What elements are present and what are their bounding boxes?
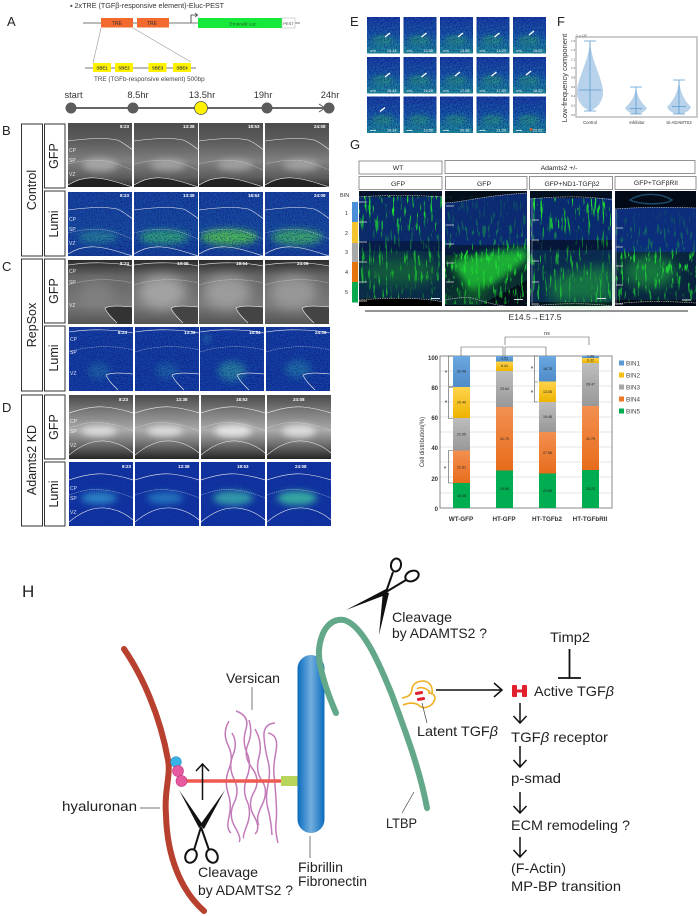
panel E: time-lapse tiles: 13:36: [424, 49, 433, 53]
image row: Control Lumi: 24:08: [314, 193, 326, 198]
x axis labels: HT-GFP: [492, 516, 516, 523]
legend: BIN4: [626, 396, 640, 404]
panel E: time-lapse tiles: 20:38: [460, 128, 470, 132]
image row: Adamts2 KD Lumi: [69, 462, 331, 526]
image row: Adamts2 KD GFP: 24:08: [293, 397, 305, 402]
row label: Adamts2 KD Lumi: Lumi: [47, 480, 61, 508]
image row: Control Lumi: SP: [69, 227, 76, 233]
y axis labels: 20: [431, 477, 439, 483]
panel E: time-lapse tiles: 19:14: [387, 128, 397, 132]
y ticks: [571, 39, 575, 117]
image row: Adamts2 KD Lumi: CP: [70, 486, 78, 492]
image row: Adamts2 KD GFP: 13:38: [176, 397, 188, 402]
panel G: header boxes: GFP+TGFβRII: [634, 180, 678, 187]
promoter arrow: [191, 13, 198, 23]
violin: si-ADAMTS2: [667, 80, 691, 114]
image row: Adamts2 KD GFP: VZ: [70, 443, 76, 449]
significance brackets: *: [444, 466, 447, 473]
Emerald Luc box: Emerald Luc: [230, 22, 257, 28]
row label: Adamts2 KD: [22, 395, 42, 526]
TRE caption: TRE (TGFb-responsive element) 500bp: [94, 76, 205, 83]
timeline: 8.5hr: [127, 90, 149, 100]
y axis labels: 60: [431, 416, 439, 422]
labels: Cleavage: [392, 609, 452, 625]
bar: WT-GFP: [453, 356, 470, 508]
PEST box: PEST: [283, 21, 294, 26]
bar values: 16.75: [543, 367, 552, 371]
row label: RepSox: RepSox: [25, 302, 39, 347]
image row: Control Lumi: VZ: [69, 241, 75, 247]
bar values: 41.79: [500, 437, 509, 441]
image row: Adamts2 KD GFP: CP: [70, 419, 78, 425]
image row: Control GFP: 8:23: [120, 124, 130, 129]
panel E: time-lapse tiles: 16:26: [424, 89, 433, 93]
bar values: 1.09: [587, 354, 594, 358]
timeline: [64, 90, 339, 114]
y ticks: 0.0: [571, 113, 575, 117]
BIN scale: 5: [345, 290, 348, 296]
Timp2 inhibition bar: [558, 649, 581, 678]
versican strands: [225, 711, 278, 843]
labels: Versican: [226, 670, 280, 686]
panel G: header boxes: GFP: [391, 181, 405, 188]
fibrillin fibronectin cylinder: [298, 655, 324, 833]
image row: RepSox GFP: VZ: [69, 303, 75, 309]
y ticks: 1.6: [571, 39, 575, 43]
y ticks: 0.6: [571, 85, 575, 89]
SBE elements: SBE2: [118, 66, 130, 70]
image row: Control Lumi: [68, 192, 330, 256]
panel E: time-lapse tiles: 21:20: [496, 128, 506, 132]
panel H: ECM model: [62, 558, 630, 911]
y ticks: 1.0: [571, 66, 575, 70]
panel A: reporter construct: [7, 1, 300, 83]
micrograph: WT GFP: [359, 191, 442, 306]
image row: Adamts2 KD GFP: 8:23: [119, 397, 129, 402]
y axis labels: 100: [428, 356, 439, 362]
image row: RepSox Lumi: CP: [70, 337, 78, 343]
stacked bar chart: [420, 331, 640, 523]
row label: Control Lumi: [44, 191, 65, 256]
row label: Control GFP: [44, 124, 65, 188]
row label: Control Lumi: Lumi: [47, 210, 61, 238]
panel E: time-lapse tiles: 22:02: [533, 128, 543, 132]
image row: Control Lumi: CP: [69, 217, 77, 223]
category labels: Si-ADAMTS2: [666, 120, 692, 125]
image row: RepSox GFP: CP: [69, 269, 77, 275]
row label: RepSox GFP: [44, 259, 65, 323]
x axis labels: HT-TGFb2: [532, 516, 563, 523]
bar values: 41.79: [586, 437, 595, 441]
core protein line: [183, 779, 282, 783]
bar values: 6.41: [501, 364, 508, 368]
x axis labels: WT-GFP: [449, 516, 473, 523]
row label: RepSox Lumi: [44, 326, 65, 391]
panel G: header boxes: GFP+ND1-TGFβ2: [544, 181, 600, 188]
timeline: 24hr: [321, 90, 339, 100]
image row: Adamts2 KD Lumi: 18:53: [237, 464, 249, 469]
icon: upper scissors: [346, 558, 420, 635]
bar values: 24.65: [500, 487, 509, 491]
labels: Active TGFβ: [534, 683, 614, 699]
panel letter A: A: [7, 14, 16, 29]
image row: RepSox Lumi: 8:24: [118, 330, 128, 335]
labels: Latent TGFβ: [417, 723, 498, 739]
row label: Adamts2 KD: Adamts2 KD: [25, 425, 39, 495]
TRE box 1: [101, 18, 133, 28]
image row: Control GFP: [68, 123, 330, 187]
violin: control: [577, 41, 603, 111]
panel letter C: C: [2, 259, 11, 274]
BIN scale: 3: [345, 250, 348, 256]
latent TGFβ complex: [402, 681, 435, 708]
TRE box 2: TRE: [147, 21, 158, 27]
bar values: 20.40: [457, 400, 466, 404]
SBE elements: SBE4: [176, 66, 188, 70]
SBE elements: [93, 63, 191, 72]
image row: RepSox Lumi: [69, 327, 330, 391]
panel E: time-lapse tiles: 17:08: [460, 89, 470, 93]
bar values: 21.61: [457, 466, 466, 470]
y ticks: 0.4: [571, 94, 575, 98]
image row: Adamts2 KD Lumi: 24:08: [295, 464, 307, 469]
image row: RepSox Lumi: 18:54: [249, 330, 261, 335]
bar values: [457, 354, 595, 498]
micrograph: GFP+TGFβRII: [615, 191, 696, 306]
bar values: 27.56: [543, 451, 552, 455]
labels: Cleavage: [198, 864, 258, 880]
panel G: header boxes: WT: [393, 165, 403, 172]
bar values: 20.46: [457, 370, 466, 374]
BIN scale: 4: [345, 270, 348, 276]
significance brackets: *: [445, 400, 448, 407]
panel letter H: H: [22, 582, 34, 601]
panel E: time-lapse tiles: 15:44: [387, 89, 397, 93]
image row: RepSox GFP: SP: [69, 280, 76, 286]
y ticks: 1.4: [571, 48, 575, 52]
panel E: time-lapse tiles: 17:50: [496, 89, 506, 93]
image row: Control GFP: 13:38: [183, 124, 195, 129]
image row: Control Lumi: 8:23: [120, 193, 130, 198]
significance brackets: *: [531, 366, 534, 373]
row label: Adamts2 KD GFP: [44, 395, 65, 459]
y axis labels: 80: [431, 386, 439, 392]
row label: Control GFP: GFP: [47, 143, 61, 169]
LTBP strand: [319, 620, 427, 808]
bar values: 16.48: [457, 494, 466, 498]
image row: Control GFP: 18:53: [248, 124, 260, 129]
panel letter E: E: [350, 14, 359, 29]
gridlines: [440, 371, 612, 493]
image row: Adamts2 KD Lumi: 13:38: [178, 464, 190, 469]
image row: Control GFP: CP: [69, 148, 77, 154]
up arrow: [196, 764, 209, 800]
labels: Fibronectin: [298, 873, 367, 889]
PEST box: [282, 18, 295, 28]
panel E: time-lapse tiles: 19:56: [424, 128, 433, 132]
image row: Control Lumi: 18:53: [248, 193, 260, 198]
bar values: 21.05: [457, 432, 466, 436]
y ticks: 0.2: [571, 104, 575, 108]
significance brackets: *: [531, 390, 534, 397]
y axis labels: 40: [431, 446, 439, 452]
construct line: [83, 22, 300, 24]
TRE box 1: TRE: [112, 21, 123, 27]
panel E: time-lapse tiles: 13:58: [460, 49, 470, 53]
arrow: latent to active: [436, 683, 502, 697]
y axis labels: 0: [435, 507, 439, 513]
panel letter D: D: [2, 400, 11, 415]
panel F: violin plot: [560, 33, 697, 125]
bar values: 19.48: [543, 415, 552, 419]
image row: Control GFP: 24:08: [314, 124, 326, 129]
BIN scale: [340, 193, 358, 302]
SBE elements: SBE3: [152, 66, 164, 70]
icon: lower scissors: [179, 790, 225, 865]
bar values: 25.23: [586, 487, 595, 491]
image row: Adamts2 KD Lumi: VZ: [70, 510, 76, 516]
image row: RepSox Lumi: SP: [70, 350, 77, 356]
category labels: [583, 120, 692, 125]
image row: Adamts2 KD Lumi: SP: [70, 496, 77, 502]
TRE box 2: [137, 18, 169, 28]
labels: (F-Actin): [511, 860, 566, 876]
binding domain: [281, 776, 298, 786]
panel E: time-lapse tiles: 18:32: [533, 89, 543, 93]
image row: Control Lumi: 13:38: [183, 193, 195, 198]
labels: by ADAMTS2 ?: [198, 882, 293, 898]
legend: BIN3: [626, 384, 640, 392]
row label: Control: [22, 124, 42, 256]
legend: [619, 360, 640, 416]
labels: hyaluronan: [62, 798, 137, 814]
legend: BIN2: [626, 372, 640, 380]
labels: LTBP: [386, 815, 417, 831]
image row: RepSox GFP: 18:54: [236, 261, 248, 266]
labels: [62, 609, 630, 898]
y ticks: 1.2: [571, 58, 575, 62]
image row: RepSox Lumi: 13:39: [184, 330, 196, 335]
image row: Adamts2 KD GFP: 18:53: [236, 397, 248, 402]
BIN scale: 1: [345, 211, 348, 217]
x axis labels: HT-TGFbRII: [573, 516, 608, 523]
bar: HT-GFP: [496, 356, 513, 508]
panel E: time-lapse tiles: 14:20: [496, 49, 506, 53]
leader lines: [140, 687, 427, 858]
timeline: 19hr: [254, 90, 272, 100]
timeline: 13.5hr: [189, 90, 215, 100]
image row: RepSox Lumi: VZ: [70, 371, 76, 377]
age bracket and label: E14.5→E17.5: [509, 312, 562, 322]
BIN scale: BIN: [340, 193, 349, 199]
labels: p-smad: [511, 770, 561, 786]
image row: Adamts2 KD GFP: [69, 395, 331, 459]
row label: Adamts2 KD Lumi: [44, 462, 65, 526]
panel F: violin plot: 1 × 10⁷: [576, 34, 588, 38]
icon: active TGFβ dimer: [512, 685, 527, 697]
image row: Control GFP: SP: [69, 158, 76, 164]
category labels: Control: [583, 120, 597, 125]
x axis labels: [449, 516, 608, 523]
panel G: header boxes: GFP: [477, 181, 491, 188]
significance brackets: [444, 331, 589, 483]
labels: MP-BP transition: [511, 878, 621, 894]
bar values: 22.66: [543, 489, 552, 493]
bar: HT-TGFb2: [539, 356, 556, 508]
SBE line: [85, 67, 196, 69]
Emerald Luc box: [198, 18, 282, 28]
image row: Adamts2 KD Lumi: 8:23: [122, 464, 132, 469]
BIN scale: 2: [345, 231, 348, 237]
SBE elements: SBE1: [96, 66, 108, 70]
row label: Control: Control: [25, 170, 39, 210]
y axis title: Cell distribution(%): [420, 417, 426, 467]
panel G: header boxes: [359, 160, 696, 190]
construct title: ▪ 2xTRE (TGFβ-responsive element)-Eluc-PEST: [70, 1, 225, 10]
image row: RepSox GFP: [68, 260, 329, 324]
panel E: time-lapse tiles: 13:14: [387, 49, 397, 53]
bar values: 23.64: [500, 387, 509, 391]
panel letter F: F: [557, 14, 565, 29]
panel E: time-lapse tiles: [367, 17, 546, 133]
row label: RepSox: [22, 259, 42, 391]
violin: inhibitor: [625, 87, 647, 114]
panel letter G: G: [350, 137, 360, 152]
category labels: Inhibitor: [629, 120, 645, 125]
image row: RepSox Lumi: 24:09: [315, 330, 327, 335]
plot frame: [440, 356, 612, 508]
y ticks: 0.8: [571, 76, 575, 80]
image row: RepSox GFP: 13:39: [177, 261, 189, 266]
row label: RepSox Lumi: Lumi: [47, 344, 61, 372]
plot frame: [576, 37, 697, 117]
significance brackets: ns: [544, 331, 550, 337]
labels: by ADAMTS2 ?: [392, 625, 487, 641]
row label: Adamts2 KD GFP: GFP: [47, 414, 61, 440]
image row: Adamts2 KD GFP: SP: [70, 429, 77, 435]
panel letter B: B: [2, 123, 11, 138]
image row: RepSox GFP: 24:09: [297, 261, 309, 266]
labels: Timp2: [550, 629, 590, 645]
labels: ECM remodeling ?: [511, 817, 630, 833]
bar values: 3.32: [587, 358, 594, 362]
legend: BIN1: [626, 360, 640, 368]
bar values: 28.47: [586, 382, 595, 386]
row label: RepSox GFP: GFP: [47, 278, 61, 304]
timeline: start: [64, 90, 83, 100]
micrograph: GFP+ND1-TGFβ2: [530, 191, 612, 306]
labels: TGFβ receptor: [511, 729, 608, 745]
pathway arrows: [514, 703, 526, 857]
panel G: header boxes: Adamts2 +/-: [541, 165, 577, 172]
micrograph: Adamts2 +/- GFP: [445, 191, 527, 306]
bar: HT-TGFbRII: [582, 356, 599, 508]
bar values: 3.51: [501, 356, 508, 360]
zoom lines: [93, 28, 191, 63]
hyaluronan strand: [124, 649, 204, 911]
image row: Control GFP: VZ: [69, 172, 75, 178]
y axis title: Low-frequency component: [560, 33, 569, 122]
significance brackets: *: [445, 370, 448, 377]
labels: Fibrillin: [298, 859, 343, 875]
panel E: time-lapse tiles: 15:02: [533, 49, 543, 53]
link protein beads: [171, 757, 187, 786]
y axis labels: [428, 356, 439, 513]
image row: RepSox GFP: 8:24: [120, 261, 130, 266]
bar values: 13.55: [543, 390, 552, 394]
legend: BIN5: [626, 408, 640, 416]
